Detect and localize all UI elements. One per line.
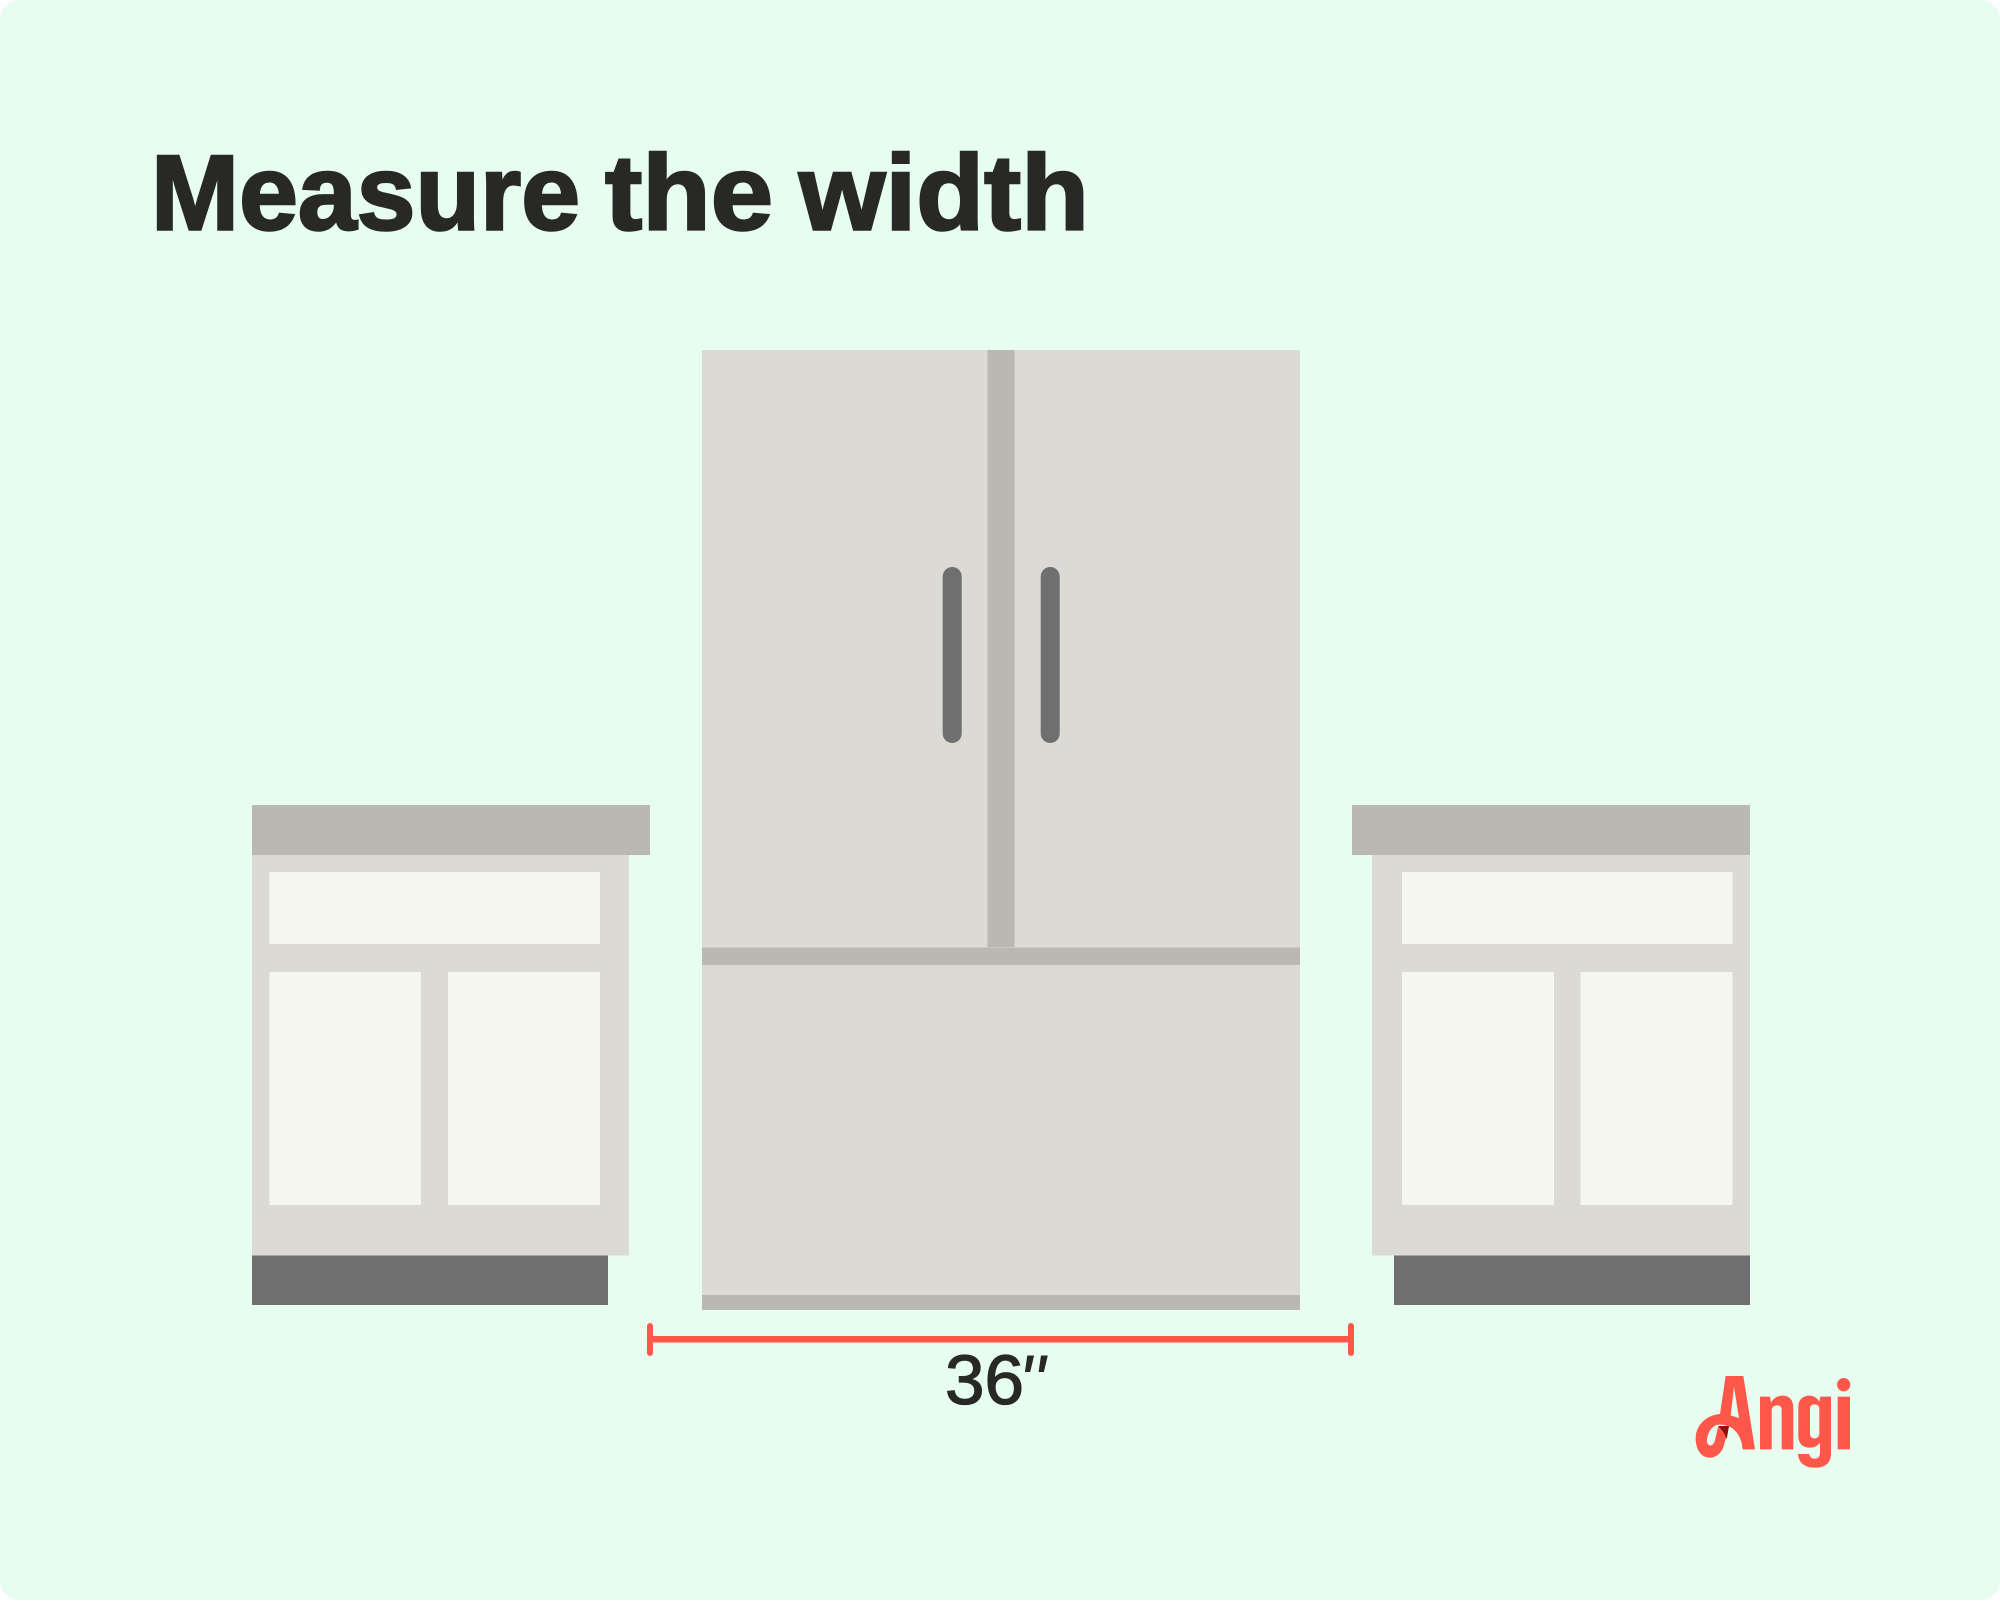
door split — [988, 350, 1014, 947]
title: width — [798, 132, 1089, 252]
left door — [1402, 972, 1554, 1205]
title — [151, 132, 1089, 252]
drawer front — [270, 872, 600, 944]
left handle — [943, 567, 962, 743]
fridge body — [702, 350, 1300, 1310]
measurement label — [945, 1340, 1048, 1425]
width measurement arrow — [647, 1323, 1354, 1356]
right handle — [1041, 567, 1060, 743]
refrigerator — [702, 350, 1300, 1310]
title: Measure — [151, 132, 580, 252]
countertop — [1352, 805, 1750, 855]
title: the — [605, 132, 773, 252]
right base cabinet — [1352, 805, 1750, 1305]
measurement label: 36 — [945, 1341, 1024, 1419]
measurement label: " — [1018, 1340, 1048, 1425]
right door — [448, 972, 600, 1205]
countertop — [252, 805, 650, 855]
logo: Angi — [1696, 1376, 1850, 1468]
toe kick — [1394, 1256, 1750, 1305]
drawer front — [1402, 872, 1732, 944]
toe kick — [252, 1256, 608, 1305]
bottom trim — [702, 1295, 1300, 1310]
left base cabinet — [252, 805, 650, 1305]
left door — [270, 972, 421, 1205]
freezer divider — [702, 948, 1300, 965]
right door — [1580, 972, 1732, 1205]
cabinet body — [252, 855, 629, 1256]
cabinet body — [1372, 855, 1750, 1256]
